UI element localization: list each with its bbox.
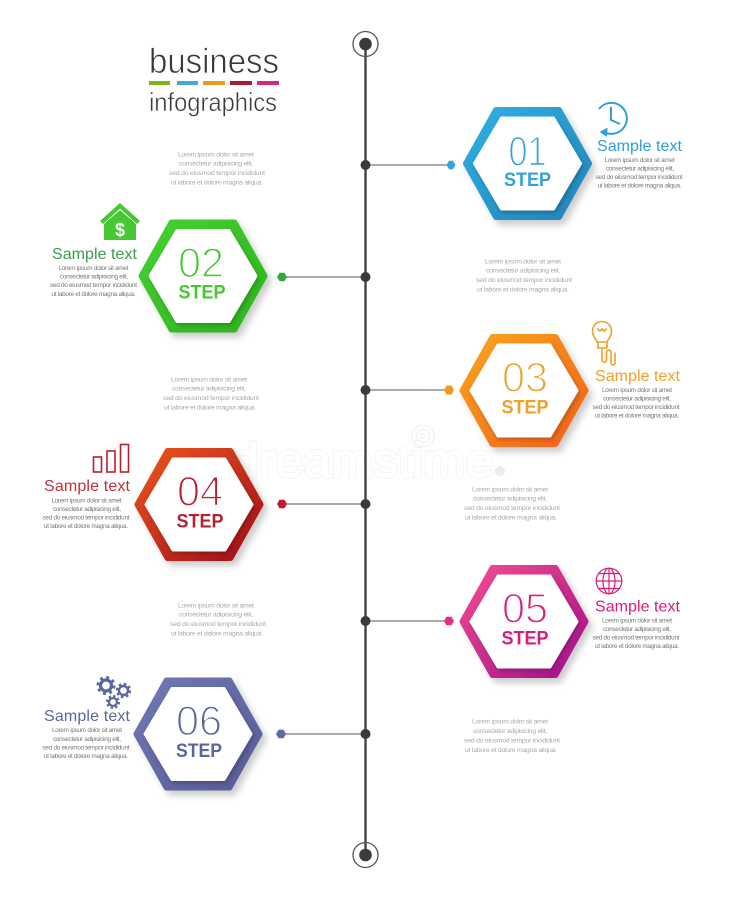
floating text block 3 bbox=[163, 376, 259, 412]
floating text block 6: ut labore et dolore magna aliqua. bbox=[465, 747, 557, 754]
floating text block 3: Lorem ipsum dolor sit amet bbox=[171, 376, 247, 384]
floating text block 2: consectetur adipisicing elit, bbox=[486, 268, 560, 274]
floating text block 3: ut labore et dolore magna aliqua. bbox=[164, 404, 256, 412]
hexagon 04: 04 bbox=[177, 468, 223, 514]
floating text block 6: Lorem ipsum dolor sit amet bbox=[472, 718, 548, 726]
text 04: ut labore et dolore magna aliqua. bbox=[44, 523, 128, 530]
step 03 bbox=[360, 322, 681, 444]
text 03: Lorem ipsum dolor sit amet bbox=[602, 387, 672, 394]
floating text block 2 bbox=[476, 258, 572, 294]
icon: globe bbox=[596, 568, 622, 594]
text 03: consectetur adipisicing elit, bbox=[603, 396, 671, 402]
timeline bbox=[353, 32, 378, 868]
text 03 bbox=[592, 387, 680, 420]
title: infographics bbox=[149, 87, 277, 117]
hexagon 02 bbox=[142, 222, 264, 330]
connector 02 bbox=[277, 272, 370, 282]
step 05 bbox=[360, 568, 681, 675]
text 06: consectetur adipisicing elit, bbox=[53, 736, 121, 743]
hexagon 01 bbox=[466, 110, 589, 217]
text 05: consectetur adipisicing elit, bbox=[603, 626, 671, 633]
hexagon 05: 05 bbox=[502, 584, 548, 632]
connector 04 bbox=[277, 499, 370, 509]
text 03: ut labore et dolore magna aliqua. bbox=[595, 412, 679, 420]
floating text block 4 bbox=[464, 486, 560, 522]
floating text block 4: consectetur adipisicing elit, bbox=[473, 496, 547, 502]
title: business bbox=[149, 42, 279, 81]
floating text block 5: ut labore et dolore magna aliqua. bbox=[171, 630, 263, 638]
floating text block 5: consectetur adipisicing elit, bbox=[179, 612, 253, 618]
icon: house with dollar: $ bbox=[115, 220, 125, 240]
floating text block 6 bbox=[464, 718, 560, 754]
hexagon 06 bbox=[136, 680, 260, 788]
label 02: Sample text bbox=[52, 246, 138, 263]
hexagon 05: STEP bbox=[502, 628, 548, 650]
floating text block 1: sed do eiusmod tempor incididunt bbox=[169, 170, 265, 177]
hexagon 03: 03 bbox=[502, 354, 548, 400]
floating text block 3: consectetur adipisicing elit, bbox=[172, 386, 246, 392]
text 04: Lorem ipsum dolor sit amet bbox=[52, 498, 122, 504]
hexagon 04: STEP bbox=[176, 510, 224, 532]
hexagon 05 bbox=[462, 568, 586, 675]
floating text block 2: sed do eiusmod tempor incididunt bbox=[476, 277, 572, 284]
text 05: sed do eiusmod tempor incididunt bbox=[592, 634, 680, 642]
text 06: ut labore et dolore magna aliqua. bbox=[44, 753, 128, 760]
icon: house with dollar bbox=[100, 203, 140, 240]
watermark: dreamstime bbox=[231, 435, 493, 488]
hexagon 03 bbox=[462, 337, 586, 444]
text 02: sed do eiusmod tempor incididunt bbox=[50, 282, 137, 289]
floating text block 6: sed do eiusmod tempor incididunt bbox=[464, 738, 560, 744]
text 05: Lorem ipsum dolor sit amet bbox=[602, 618, 672, 624]
floating text block 1: Lorem ipsum dolor sit amet bbox=[178, 152, 254, 158]
floating text block 4: sed do eiusmod tempor incididunt bbox=[464, 505, 560, 512]
icon: gears bbox=[98, 677, 130, 708]
text 02 bbox=[50, 265, 137, 298]
icon: bar chart bbox=[94, 444, 128, 472]
text 01: sed do eiusmod tempor incididunt bbox=[596, 174, 683, 181]
text 04 bbox=[42, 498, 130, 530]
label 04: Sample text bbox=[44, 478, 131, 495]
watermark: dreamstime bbox=[231, 435, 493, 488]
floating text block 5 bbox=[170, 602, 266, 638]
floating text block 5: Lorem ipsum dolor sit amet bbox=[178, 602, 254, 610]
floating text block 1 bbox=[169, 152, 265, 186]
label 01: Sample text bbox=[597, 138, 683, 155]
text 06: Lorem ipsum dolor sit amet bbox=[52, 727, 122, 734]
floating text block 6: consectetur adipisicing elit, bbox=[473, 728, 547, 735]
hexagon 06: 06 bbox=[176, 697, 222, 744]
text 06: sed do eiusmod tempor incididunt bbox=[42, 744, 130, 752]
text 01: Lorem ipsum dolor sit amet bbox=[604, 157, 675, 164]
text 05: ut labore et dolore magna aliqua. bbox=[595, 643, 679, 650]
hexagon 01: STEP bbox=[504, 169, 551, 191]
connector 05 bbox=[360, 616, 454, 626]
floating text block 1: consectetur adipisicing elit, bbox=[179, 160, 253, 168]
connector 06 bbox=[276, 729, 370, 739]
label 05: Sample text bbox=[595, 598, 681, 616]
text 04: consectetur adipisicing elit, bbox=[53, 506, 121, 513]
text 01: consectetur adipisicing elit, bbox=[606, 166, 674, 172]
step 02 bbox=[50, 203, 370, 330]
floating text block 2: ut labore et dolore magna aliqua. bbox=[477, 286, 569, 294]
text 02: Lorem ipsum dolor sit amet bbox=[58, 265, 129, 272]
text 06 bbox=[42, 727, 130, 760]
floating text block 1: ut labore et dolore magna aliqua. bbox=[171, 180, 263, 186]
hexagon 02: STEP bbox=[178, 282, 226, 304]
step 06 bbox=[42, 677, 370, 788]
step 04 bbox=[42, 444, 370, 558]
floating text block 3: sed do eiusmod tempor incididunt bbox=[163, 395, 259, 402]
title bbox=[149, 42, 279, 117]
text 05 bbox=[592, 618, 680, 650]
connector 01 bbox=[360, 160, 456, 170]
text 02: consectetur adipisicing elit, bbox=[60, 274, 128, 280]
text 01: ut labore et dolore magna aliqua. bbox=[598, 182, 682, 190]
step 01 bbox=[360, 103, 683, 217]
hexagon 01: 01 bbox=[508, 128, 546, 174]
text 01 bbox=[596, 157, 683, 190]
label 03: Sample text bbox=[595, 368, 681, 385]
floating text block 4: ut labore et dolore magna aliqua. bbox=[465, 514, 557, 522]
text 04: sed do eiusmod tempor incididunt bbox=[42, 514, 130, 522]
floating text block 5: sed do eiusmod tempor incididunt bbox=[170, 621, 266, 628]
hexagon 06: STEP bbox=[176, 740, 222, 762]
icon: light bulb bbox=[592, 322, 615, 365]
hexagon 03: STEP bbox=[502, 396, 548, 418]
floating text block 4: Lorem ipsum dolor sit amet bbox=[472, 486, 548, 494]
text 03: sed do eiusmod tempor incididunt bbox=[592, 404, 680, 411]
connector 03 bbox=[360, 385, 454, 395]
hexagon 04 bbox=[138, 451, 260, 558]
hexagon 02: 02 bbox=[178, 239, 224, 286]
label 06: Sample text bbox=[44, 708, 131, 725]
text 02: ut labore et dolore magna aliqua. bbox=[52, 291, 136, 298]
icon: clock bbox=[599, 103, 627, 136]
floating text block 2: Lorem ipsum dolor sit amet bbox=[485, 258, 561, 266]
